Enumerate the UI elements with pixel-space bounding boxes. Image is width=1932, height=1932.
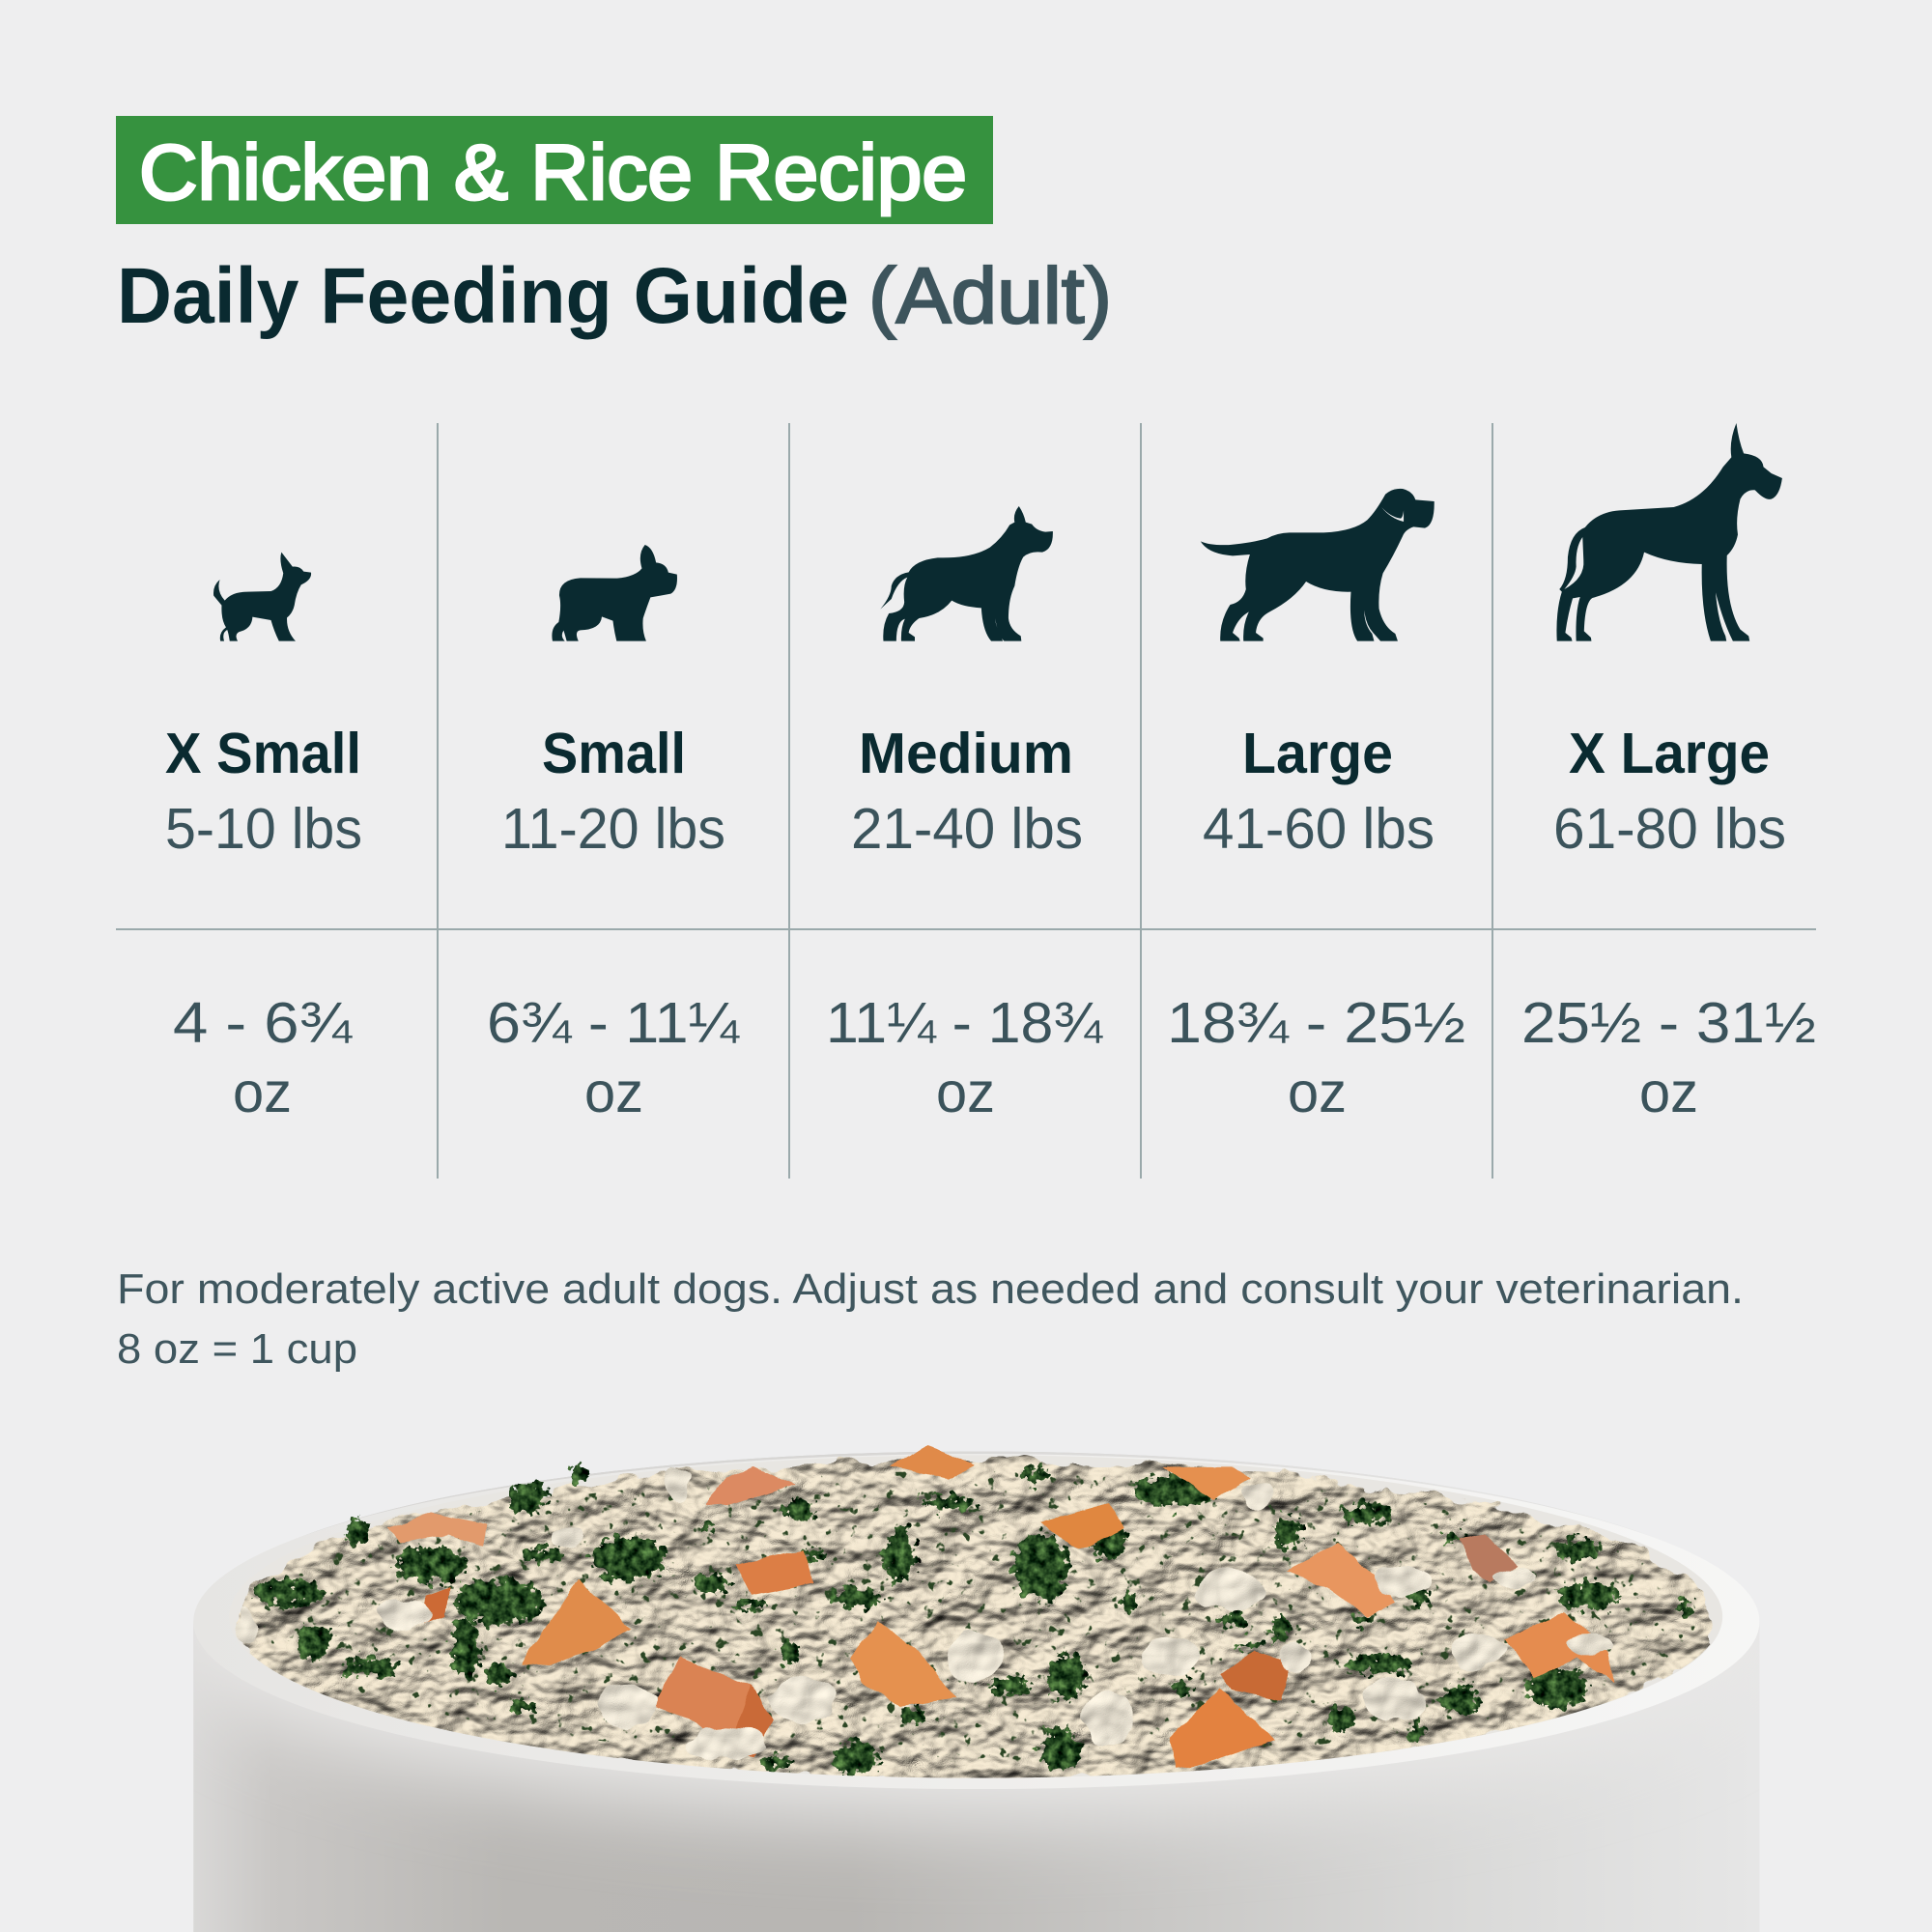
title badge: Chicken & Rice Recipe: Chicken & Rice Recipe: [139, 129, 967, 216]
column: x small: X Small: [165, 722, 361, 785]
column: small: Small: [542, 722, 686, 785]
column: x large: X Large: [1569, 722, 1770, 785]
chicken and rice chunks: [237, 1467, 1611, 1759]
column: large: 18¾ - 25½: [1167, 991, 1465, 1055]
column: small: oz: [584, 1061, 643, 1124]
column: x small: [165, 722, 362, 1124]
column: large: [1167, 722, 1465, 1124]
icon: x small dog: [213, 553, 311, 641]
column: x small: 4 - 6¾: [173, 991, 353, 1055]
footnote: 8 oz = 1 cup: [117, 1325, 357, 1373]
heading: Daily Feeding Guide (Adult): (Adult): [868, 252, 1112, 340]
column: x small: 5-10 lbs: [165, 797, 362, 861]
column: medium: 21-40 lbs: [851, 797, 1083, 861]
bowl body: [193, 1452, 1759, 1932]
bowl inner wall: [229, 1455, 1722, 1778]
column: small: 6¾ - 11¼: [487, 991, 740, 1055]
column: x small: oz: [233, 1061, 292, 1124]
icon: x large dog: [1556, 423, 1782, 641]
column: medium: Medium: [859, 722, 1073, 785]
column: x large: 61-80 lbs: [1553, 797, 1786, 861]
sweet potato pieces: [388, 1445, 1614, 1768]
bowl of food: [175, 1438, 1776, 1932]
column: x large: oz: [1639, 1061, 1698, 1124]
column: medium: oz: [936, 1061, 995, 1124]
column: x large: 25½ - 31½: [1521, 991, 1816, 1055]
column: large: Large: [1242, 722, 1393, 785]
food base: [237, 1460, 1716, 1783]
column: small: 11-20 lbs: [501, 797, 725, 861]
bowl body highlight: [175, 1438, 1776, 1820]
column: small: [487, 722, 740, 1124]
footnote: [117, 1265, 1744, 1373]
icon: medium dog: [880, 506, 1053, 641]
icon: large dog: [1201, 489, 1435, 641]
footnote: For moderately active adult dogs. Adjust as needed and consult your veterinarian.: [117, 1265, 1744, 1313]
feeding table grid lines: [116, 423, 1816, 1179]
kale pieces: [252, 1463, 1694, 1775]
column: large: 41-60 lbs: [1203, 797, 1435, 861]
column: medium: [826, 722, 1103, 1124]
icon: small dog: [552, 545, 677, 641]
column: x large: [1521, 722, 1816, 1124]
column: medium: 11¼ - 18¾: [826, 991, 1103, 1055]
heading: Daily Feeding Guide (Adult): Daily Feeding Guide: [117, 252, 849, 340]
column: large: oz: [1288, 1061, 1347, 1124]
bowl rim: [193, 1454, 1759, 1789]
